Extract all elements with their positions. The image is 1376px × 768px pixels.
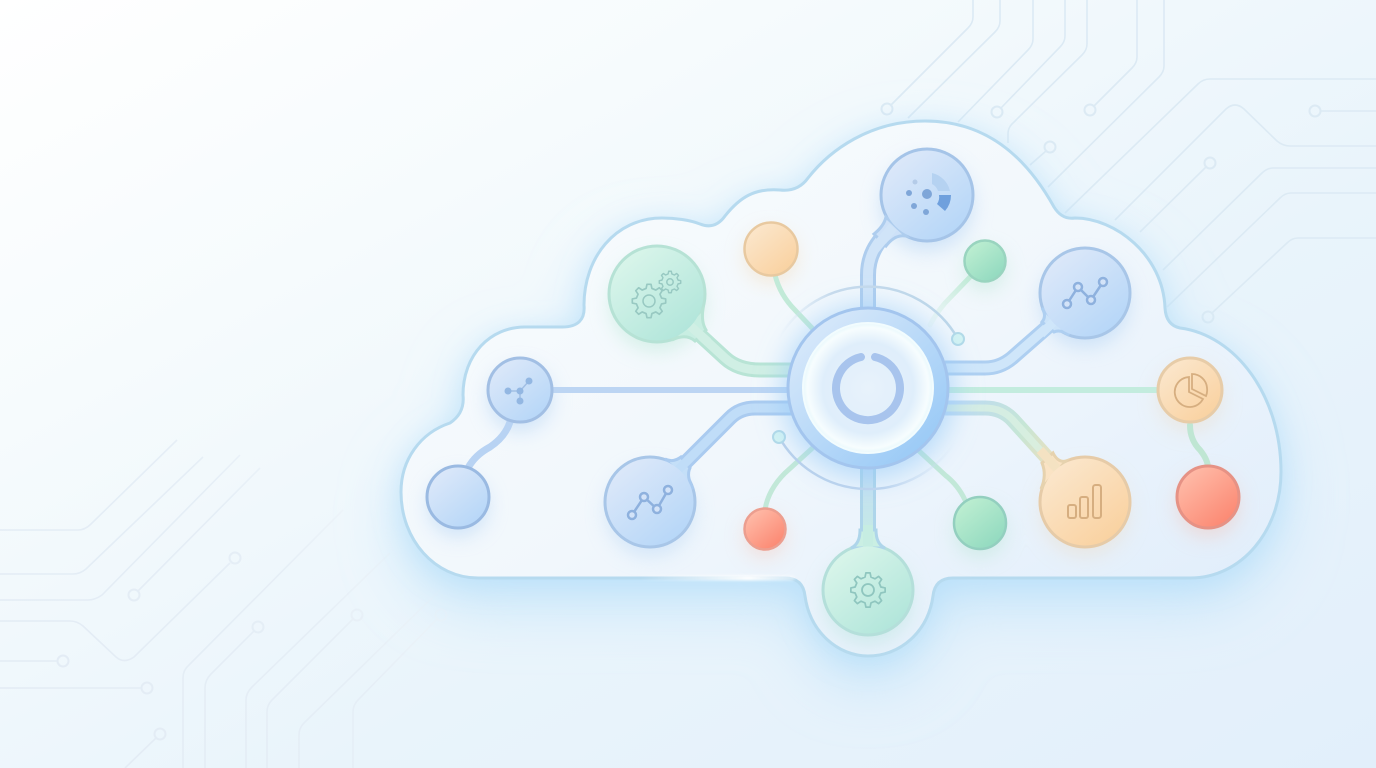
node: line chart left <box>604 453 696 548</box>
node: pie chart <box>1158 358 1222 422</box>
node shadows <box>428 159 1239 644</box>
node: large red <box>1177 466 1239 528</box>
node: medium green <box>954 497 1006 549</box>
orbit dots <box>773 333 964 443</box>
node: small orange <box>744 222 798 276</box>
straight blue link to left node <box>550 387 795 393</box>
connector lines <box>468 275 1208 510</box>
node: small green <box>964 240 1006 282</box>
circuit traces bottom-left <box>0 440 446 768</box>
node: plain blue <box>427 466 489 528</box>
node: small red <box>744 508 786 550</box>
node: gear bottom <box>822 525 914 636</box>
thin green links <box>775 275 812 328</box>
node: gears <box>608 244 708 344</box>
central hub <box>782 306 954 478</box>
node: line chart right <box>1038 246 1132 340</box>
node: left network <box>488 358 552 422</box>
circuit traces top-right <box>882 0 1376 322</box>
cloud outline <box>401 121 1281 656</box>
straight green link to pie node <box>945 387 1160 393</box>
hub orbit arcs <box>778 287 958 489</box>
cloud glow <box>401 126 1281 682</box>
tube connectors <box>678 232 1062 550</box>
node: bar chart <box>1038 450 1132 548</box>
node: analytics radial <box>873 148 974 251</box>
